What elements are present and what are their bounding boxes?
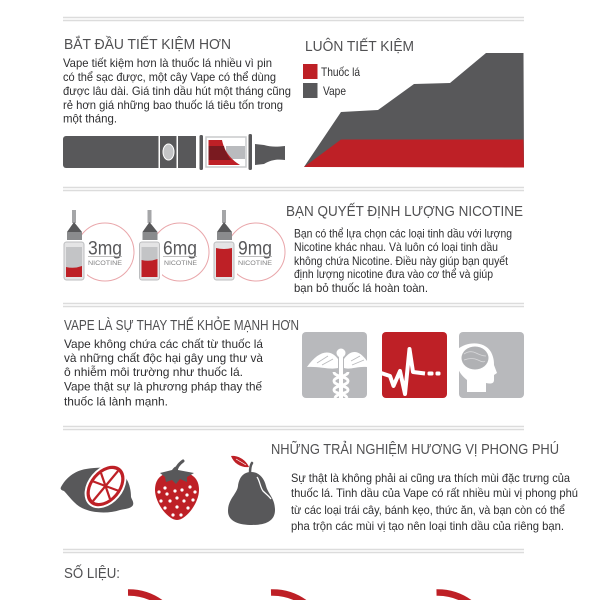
panel: always saving	[303, 38, 524, 168]
heading: statistics: SỐ LIỆU:	[64, 564, 120, 582]
text block: nicotine: định lượng nicotine đưa vào cơ thể và giúp	[294, 267, 493, 281]
icon: 3mg bottle: 3mg	[88, 238, 122, 260]
text block: healthier	[64, 337, 263, 408]
text block: flavours: pha trộn các mùi vị tạo nên loại tinh dầu của riêng bạn.	[291, 519, 564, 533]
panel: nicotine bottles	[61, 210, 285, 283]
panel: fruits	[61, 456, 275, 525]
text block: saving more: được lâu dài. Giá tinh dầu hút một tháng cũng	[63, 84, 291, 98]
icon: 9mg bottle: NICOTINE	[238, 260, 273, 267]
icon: vape pen	[63, 134, 285, 170]
text block: saving more: Vape tiết kiệm hơn là thuốc lá nhiều vì pin	[63, 56, 272, 70]
icon: pear	[228, 456, 275, 525]
legend: vape	[303, 83, 346, 98]
heading: saving more: BẮT ĐẦU TIẾT KIỆM HƠN	[64, 35, 231, 53]
text block: nicotine: bạn bỏ thuốc lá hoàn toàn.	[294, 281, 428, 295]
heading: flavours: NHỮNG TRẢI NGHIỆM HƯƠNG VỊ PHONG PHÚ	[271, 441, 559, 458]
text block: healthier: Vape thật sự là phương pháp thay thế	[64, 380, 262, 394]
text block: flavours: Sự thật là không phải ai cũng ưa thích mùi đặc trưng của	[291, 471, 570, 485]
panel: saving more	[63, 35, 291, 170]
icon: 9mg bottle	[211, 210, 285, 283]
icon: 9mg bottle: 9mg	[238, 238, 272, 260]
text block: nicotine: Nicotine khác nhau. Và luôn có loại tinh dầu	[294, 240, 498, 254]
text block: flavours: thuốc lá. Tinh dầu của Vape có rất nhiều mùi vị phong phú	[291, 486, 578, 500]
text block: healthier: ô nhiễm môi trường như thuốc lá.	[64, 364, 243, 379]
panel: flavours text	[271, 441, 578, 533]
text block: healthier: Vape không chứa các chất từ thuốc lá	[64, 337, 263, 351]
chart: donut 3	[436, 592, 470, 600]
icon: caduceus tile	[302, 332, 367, 398]
text block: saving more: một tháng.	[63, 112, 117, 126]
text block: flavours: từ các loại trái cây, bánh kẹo, thức ăn, và bạn còn có thể	[291, 503, 565, 517]
text block: nicotine: không chứa Nicotine. Điều này giúp bạn quyết	[294, 254, 509, 268]
icon: 6mg bottle: 6mg	[163, 238, 197, 260]
text block: healthier: và những chất độc hại gây ung thư và	[64, 351, 263, 365]
text block: healthier: thuốc lá lành mạnh.	[64, 394, 168, 408]
icon: 3mg bottle	[61, 210, 134, 283]
text block: nicotine: Bạn có thể lựa chọn các loại tinh dầu với lượng	[294, 226, 512, 240]
text block: saving more	[63, 56, 291, 126]
area chart	[304, 53, 524, 168]
icon: 6mg bottle: NICOTINE	[164, 260, 198, 267]
legend: tobacco	[303, 64, 360, 79]
heading: decide nicotine: BẠN QUYẾT ĐỊNH LƯỢNG NICOTINE	[286, 203, 523, 220]
icon: 6mg bottle	[136, 210, 209, 283]
text block: flavours	[291, 471, 578, 533]
icon: strawberry	[155, 461, 199, 520]
text block: nicotine	[294, 226, 512, 295]
panel: nicotine text	[286, 203, 523, 295]
chart: donut 1	[128, 592, 161, 600]
panel: healthier	[64, 316, 524, 408]
text block: saving more: có thể sạc được, một cây Vape có thể dùng	[63, 70, 276, 84]
heading: always saving: LUÔN TIẾT KIỆM	[305, 38, 414, 55]
legend: vape: Vape	[323, 84, 346, 98]
icon: heartbeat tile	[381, 332, 447, 398]
chart: donut 2	[271, 592, 305, 600]
icon: lemon	[61, 456, 135, 516]
heading: healthier: VAPE LÀ SỰ THAY THẾ KHỎE MẠNH HƠN	[64, 316, 299, 334]
text block: saving more: rẻ hơn giá những bao thuốc lá tiêu tốn trong	[63, 98, 283, 112]
legend: tobacco: Thuốc lá	[321, 65, 360, 79]
panel: statistics	[64, 564, 470, 600]
icon: brain head tile	[458, 332, 524, 398]
icon: 3mg bottle: NICOTINE	[88, 260, 123, 267]
